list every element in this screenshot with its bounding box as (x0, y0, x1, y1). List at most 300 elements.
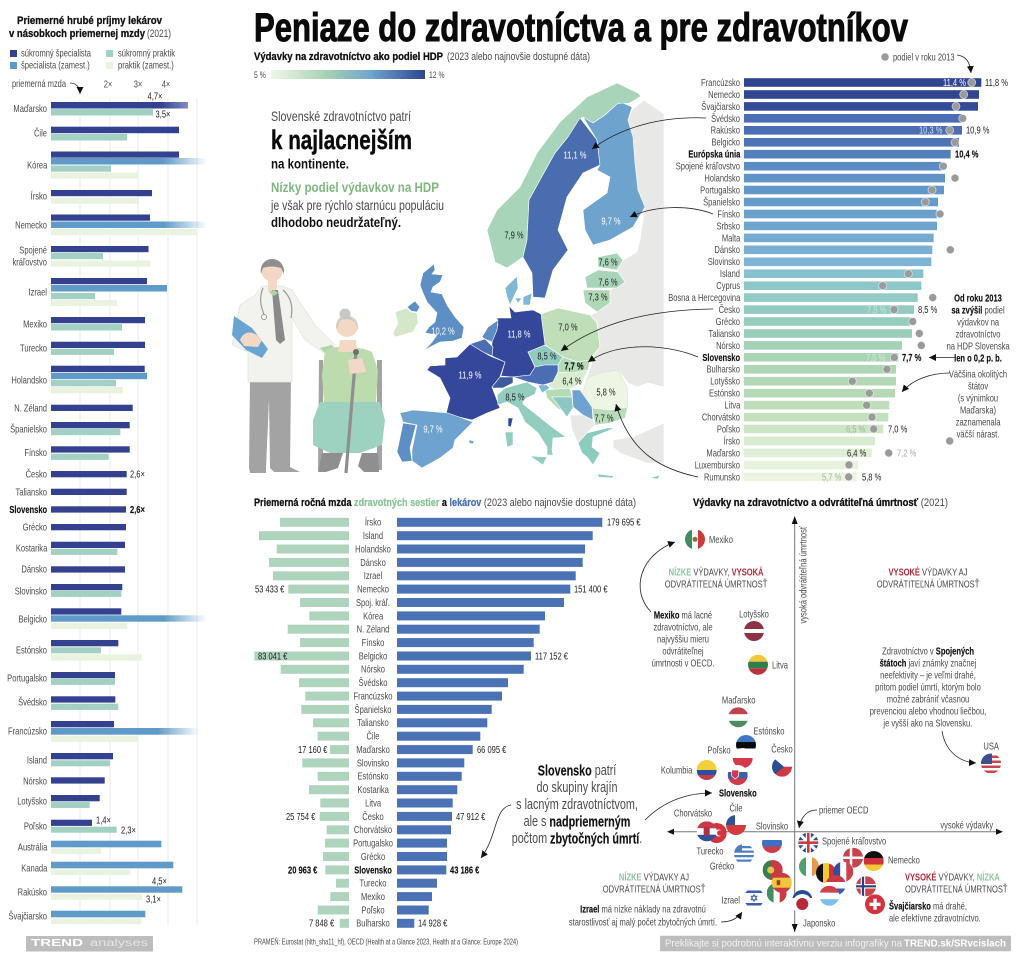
row: Česko: 47 912 € (456, 811, 485, 822)
map: Bulgaria (592, 407, 628, 425)
label: Kolumbia: Kolumbia (661, 764, 693, 776)
row: Island: Island (363, 530, 383, 541)
row: Turecko (20, 342, 145, 355)
row: Turecko: Turecko (360, 877, 386, 889)
legend: colour scale: 12 % (429, 70, 445, 80)
bar: Rumunsko: 5,7 % (822, 471, 841, 483)
bar: Maďarsko: 7,2 % (897, 447, 916, 459)
callout: neighbouring states: Väčšina okolitých (949, 368, 1007, 380)
label: Maďarsko: Maďarsko (722, 694, 755, 706)
bar: Francúzsko: 11,4 % (943, 77, 966, 88)
map: Benelux (470, 320, 498, 356)
bar: Cyprus: Cyprus (716, 280, 740, 291)
row: Švédsko: Švédsko (18, 696, 47, 708)
label: Japonsko: Japonsko (803, 917, 835, 929)
map: Finland (583, 103, 645, 245)
row: Island: Island (27, 754, 47, 766)
row: Španielsko (10, 422, 130, 435)
row: Turecko (336, 877, 437, 889)
quadrant label: low spending, high mortality: ODVRÁTITEĽNÁ ÚMRTNOSŤ (665, 578, 768, 590)
row: Mexiko: Mexiko (361, 891, 385, 902)
row: Spoj. kráľ.: Spoj. kráľ. (356, 597, 390, 608)
row: Kostarika (309, 784, 457, 795)
map: Slovakia (558, 357, 590, 373)
row: Turecko: Turecko (20, 342, 47, 354)
map: Austria (513, 365, 558, 385)
row: Česko (26, 468, 145, 480)
row: Holandsko: Holandsko (355, 543, 391, 555)
note: Mexiko: zdravotníctvo, ale (653, 621, 713, 633)
bar: Belgicko: Belgicko (711, 137, 740, 148)
row: Island (27, 753, 113, 766)
row: N. Zéland: N. Zéland (357, 623, 389, 635)
row: Poľsko (24, 814, 136, 836)
row: Slovensko: 2,6× (130, 504, 145, 515)
row: Slovensko: 20 963 € (288, 864, 317, 876)
label: Izrael: Izrael (722, 894, 740, 906)
bar: Belgicko (711, 137, 959, 148)
row: Portugalsko (325, 837, 447, 849)
row: Poľsko: 1,4× (96, 814, 111, 826)
bar: Estónsko: Estónsko (709, 387, 740, 399)
row: Belgicko (18, 608, 207, 629)
flag: Slovensko (728, 765, 748, 786)
patient in chair (313, 308, 385, 473)
row: Maďarsko: 17 160 € (298, 744, 327, 755)
flag: Turecko (710, 823, 727, 843)
row: Chorvátsko: Chorvátsko (354, 824, 392, 836)
label: Slovensko: Slovensko (719, 787, 757, 799)
row: Dánsko: Dánsko (360, 557, 386, 568)
map: Ireland (393, 308, 418, 337)
row: Česko: Česko (362, 811, 384, 822)
butterfly chart: salaries (254, 517, 641, 929)
map: Slovenia (538, 385, 550, 393)
label: priemer OECD (799, 804, 869, 828)
row: Grécko (23, 521, 126, 533)
bar: Slovensko (702, 352, 921, 363)
note: USA: štátoch javí známky značnej (880, 657, 976, 669)
note: Mexiko (640, 542, 714, 669)
map value labels: 7,3 % (588, 291, 608, 303)
label: Mexiko: Mexiko (709, 534, 733, 545)
bar: Dánsko (714, 244, 954, 256)
map: France (427, 344, 505, 420)
row: Bulharsko: 14 928 € (418, 918, 447, 929)
bar: Bosna a Hercegovina (668, 292, 937, 303)
row: Holandsko: Holandsko (11, 374, 47, 386)
row: Belgicko: 117 152 € (535, 650, 568, 662)
callout: Slovakia cheap healthcare: počtom zbytočných úmrtí. (512, 829, 642, 847)
bar: Česko (719, 304, 937, 315)
bar: Maďarsko (706, 447, 916, 459)
row: Francúzsko (305, 690, 502, 702)
row: Spojené kráľovstvo: Spojené (19, 244, 47, 256)
row: Francúzsko: Francúzsko (354, 690, 392, 702)
row: Kórea (309, 610, 545, 622)
scatter chart (569, 516, 1008, 932)
logo: TREND analyses: analyses (90, 938, 148, 949)
quadrant label: high spending, low mortality (905, 871, 1008, 895)
flag: Nemecko (864, 851, 884, 872)
bar: Poľsko: Poľsko (717, 423, 740, 435)
row: Izrael: Izrael (364, 570, 382, 582)
row: Česko: 2,6× (130, 468, 145, 480)
row: Fínsko: Fínsko (24, 447, 47, 458)
bar: Bosna a Hercegovina: Bosna a Hercegovina (668, 292, 741, 303)
bar: Cyprus (716, 280, 921, 291)
map value labels: 9,7 % (423, 423, 443, 435)
heading: doctors' income: Priemerné hrubé príjmy lekárov (17, 15, 163, 27)
heading: salaries: Priemerná ročná mzda zdravotných sestier a lekárov (2023 alebo najnovšie dostupné dáta) (254, 497, 636, 509)
row: Slovinsko: Slovinsko (15, 585, 47, 597)
banner: interactive version (660, 936, 1011, 951)
text block: intro: na kontinente. (271, 156, 349, 172)
quadrant label: low spending, low mortality: NÍZKE VÝDAVKY AJ (619, 871, 689, 883)
legend: doctor types: praktik (zamest.) (118, 59, 174, 71)
row: Belgicko: Belgicko (18, 613, 47, 625)
flag: Luxembursko (819, 886, 839, 906)
callout: Slovakia cheap healthcare: do skupiny krajín (537, 778, 617, 796)
bar: Francúzsko: Francúzsko (701, 77, 740, 88)
bar: Slovinsko: Slovinsko (708, 256, 740, 268)
row: Kanada (21, 862, 173, 875)
banner: interactive version: Preklikajte si podrobnú interaktívnu verziu infografiky na (665, 938, 902, 950)
bar: Litva (724, 399, 889, 411)
heading: doctors' income: v násobkoch priemernej mzdy (9, 28, 146, 40)
axes: vysoké výdavky (940, 819, 993, 831)
map: Germany (492, 306, 545, 377)
map value labels: 9,7 % (601, 215, 621, 227)
row: Litva (320, 797, 453, 809)
bar: Slovensko: Slovensko (702, 352, 740, 363)
row: N. Zéland (288, 623, 540, 635)
flag: Grécko (734, 844, 754, 864)
callout: Slovak increase: len o 0,2 p. b. (954, 352, 1002, 364)
map of Europe (393, 83, 664, 479)
quadrant label: high spending, low mortality: VYSOKÉ VÝDAVKY, NÍZKA (905, 871, 1000, 883)
flag: Česko (772, 757, 792, 777)
bar: Nemecko: Nemecko (708, 89, 740, 100)
label: Čile: Čile (729, 802, 743, 814)
map: United Kingdom (407, 264, 464, 352)
bar: Česko: Česko (719, 304, 740, 315)
row: Kostarika: Kostarika (16, 542, 48, 554)
callout: Slovak increase: sa zvýšil podiel (951, 304, 1005, 316)
bar: Dánsko: Dánsko (714, 244, 740, 256)
quadrant label: low spending, low mortality: ODVRÁTITEĽNÁ ÚMRTNOSŤ (603, 883, 706, 895)
row: Švédsko (299, 677, 508, 688)
row: Rakúsko: 4,5× (152, 875, 167, 887)
subtitle: share of GDP (254, 51, 590, 63)
legend: doctor types: súkromný praktik (118, 47, 175, 59)
row: Belgicko: 83 041 € (258, 650, 287, 662)
flag: Čile (726, 815, 746, 835)
bar: Česko: 7,5 % (867, 304, 886, 315)
map value labels: 8,5 % (505, 391, 525, 403)
subtitle: share of GDP: (2023 alebo najnovšie dostupné dáta) (447, 51, 590, 63)
bar: Luxembursko: Luxembursko (695, 459, 740, 471)
row: Kórea: Kórea (27, 159, 48, 171)
axes: vysoká odvrátiteľná úmrtnosť (797, 526, 809, 624)
row: Španielsko: Španielsko (10, 423, 47, 435)
flag: Kórea (792, 890, 812, 898)
row: N. Zéland (14, 402, 133, 414)
row: Kanada: Kanada (21, 862, 48, 874)
bar: Chorvátsko: Chorvátsko (702, 411, 740, 423)
map: Corsica (508, 418, 513, 427)
map: Spain (400, 410, 474, 468)
map value labels: 11,8 % (508, 328, 530, 340)
row: Grécko (323, 851, 447, 862)
legend: 2013 share (881, 51, 971, 73)
label: Česko: Česko (771, 743, 793, 755)
bar: Grécko (716, 316, 917, 327)
map: Italy (497, 382, 566, 465)
axis labels: 4× (162, 78, 170, 90)
row: Maďarsko: 3,5× (156, 108, 170, 120)
row: Nemecko: 151 400 € (574, 583, 608, 595)
row: Čile (34, 127, 179, 140)
bar: Malta (722, 232, 934, 244)
text block: intro: dlhodobo neudržateľný. (271, 214, 401, 230)
map value labels: 11,1 % (564, 149, 586, 161)
flag: Lotyšsko (744, 621, 764, 641)
callout: neighbouring states: Maďarska) (960, 404, 996, 416)
axis labels: 3× (134, 78, 142, 90)
bar: Luxembursko (695, 459, 858, 471)
callout: neighbouring states: (s výnimkou (958, 392, 998, 404)
map value labels: 10,2 % (431, 325, 455, 337)
bar: Rakúsko: Rakúsko (711, 125, 740, 136)
bar: Maďarsko: 6,4 % (847, 447, 866, 459)
row: Rakúsko (18, 875, 182, 905)
flag: Poľsko (733, 748, 753, 768)
row: Švajčiarsko: Švajčiarsko (8, 910, 47, 922)
axis labels: 2× (104, 78, 112, 90)
row: Francúzsko (8, 721, 199, 742)
heading: scatter: Výdavky na zdravotníctvo a odvrátiteľná úmrtnosť (2021) (693, 497, 948, 509)
axis labels (12, 78, 197, 925)
callout: neighbouring states (902, 368, 1007, 440)
map value labels: 7,6 % (598, 276, 618, 288)
row: Slovensko: 43 186 € (450, 864, 479, 876)
map: Sweden (523, 118, 600, 298)
row: Španielsko: Španielsko (355, 704, 391, 715)
row: Nemecko: 53 433 € (255, 583, 284, 595)
note: Mexiko: odvrátiteľnej (662, 645, 704, 657)
row: Maďarsko: Maďarsko (13, 103, 47, 114)
row: Švajčiarsko (8, 910, 145, 924)
bar: Slovensko: 7,7 % (902, 352, 921, 363)
row: Slovensko (9, 504, 145, 515)
map: Norway (487, 83, 641, 268)
flag: Portugalsko (763, 860, 783, 880)
bar: Portugalsko (700, 184, 944, 196)
legend: colour scale: 5 % (254, 70, 266, 80)
row: Bulharsko: 7 848 € (309, 918, 334, 929)
row: Fínsko: Fínsko (362, 637, 384, 648)
flag: Maďarsko (728, 707, 748, 728)
row: Španielsko (301, 704, 492, 715)
row: Írsko: 179 695 € (607, 517, 641, 528)
note: USA (870, 645, 986, 763)
row: Holandsko (277, 543, 585, 555)
row: Slovensko (288, 864, 479, 876)
label: Chorvátsko: Chorvátsko (674, 807, 712, 819)
row: Nórsko: Nórsko (361, 664, 385, 675)
row: Švédsko: Švédsko (359, 677, 387, 688)
text block: intro: Nízky podiel výdavkov na HDP (271, 179, 439, 195)
bar: Švajčiarsko: Švajčiarsko (701, 101, 740, 112)
note: Švajčiarsko: ale efektívne zdravotníctvo. (889, 912, 981, 924)
row: Lotyšsko (17, 795, 100, 808)
row: Poľsko: Poľsko (24, 820, 47, 832)
bar: Česko: 8,5 % (918, 304, 937, 315)
row: Poľsko (318, 904, 429, 916)
bar: Island: Island (720, 268, 740, 279)
bar: Švajčiarsko (701, 101, 978, 112)
bar: Fínsko (717, 208, 944, 220)
row: Mexiko: Mexiko (23, 318, 47, 330)
map: Serbia (572, 390, 593, 420)
doctor (232, 259, 336, 473)
source: PRAMEŇ: Eurostat (hlth_sha11_hf), OECD (Health at a Glance 2023, Health at a Glance: Europe 2024) (254, 937, 518, 947)
bar: Bulharsko: Bulharsko (706, 364, 740, 375)
bar: Estónsko (709, 387, 895, 399)
map value labels: 8,5 % (537, 350, 557, 362)
label: Turecko: Turecko (697, 845, 723, 857)
row: Portugalsko: Portugalsko (7, 672, 47, 684)
bar: Slovinsko (708, 256, 931, 268)
row: Taliansko (16, 486, 127, 498)
note: Švajčiarsko: Švajčiarsko má drahé, (889, 899, 967, 912)
note: Mexiko: najvyššiu mieru (657, 633, 709, 645)
heading: doctors' income: (2021) (147, 28, 171, 40)
row: Belgicko (254, 650, 568, 662)
map value labels: 11,9 % (459, 369, 481, 381)
row: Rakúsko: Rakúsko (18, 886, 47, 898)
map value labels: 7,6 % (598, 256, 618, 268)
row: Fínsko (300, 637, 534, 648)
row: Estónsko: Estónsko (16, 644, 47, 656)
row: Grécko: Grécko (23, 521, 47, 533)
row: Slovinsko (302, 757, 464, 769)
note: USA: neefektivity – je veľmi drahé, (880, 669, 976, 681)
row: Maďarsko (298, 744, 506, 755)
row: Čile: Čile (366, 730, 380, 742)
row: Grécko: Grécko (361, 851, 385, 862)
row: Slovinsko (15, 584, 122, 597)
callout: Slovak increase: zdravotníctvo (956, 328, 1000, 340)
row: Izrael (273, 570, 576, 582)
flag: Estónsko (736, 735, 756, 748)
flag: USA (981, 754, 1001, 774)
text block: intro: k najlacnejším (271, 125, 412, 155)
legend: doctor types: súkromný špecialista (21, 47, 92, 59)
map value labels: 7,0 % (558, 321, 578, 333)
row: Fínsko (24, 446, 130, 460)
quadrant label: high spending, high mortality: ODVRÁTITEĽNÁ ÚMRTNOSŤ (877, 578, 980, 590)
bar: Nemecko (708, 89, 979, 100)
row: Mexiko (23, 317, 145, 330)
note: Švajčiarsko (889, 899, 981, 924)
flag: Chorvátsko (697, 821, 717, 842)
row: Estónsko (318, 771, 462, 782)
note: USA: prevenciou alebo vhodnou liečbou, (870, 705, 986, 717)
flag: Írsko (799, 857, 819, 877)
bar: Bulharsko (706, 364, 896, 375)
map: Romania (583, 370, 628, 410)
bar: Poľsko: 7,0 % (888, 423, 907, 435)
callout: neighbouring states: väčší nárast. (957, 428, 999, 440)
axis labels: priemerná mzda (12, 78, 66, 90)
flag: Švajčiarsko (865, 894, 885, 914)
row: Bulharsko (309, 918, 447, 929)
row: Slovinsko: Slovinsko (357, 757, 389, 769)
row: Bulharsko: Bulharsko (356, 918, 390, 929)
legend: colour scale (254, 70, 445, 80)
bar: Srbsko: Srbsko (717, 220, 740, 232)
map: non-included countries (570, 100, 664, 463)
row: Izrael: Izrael (29, 286, 47, 298)
bar: Rakúsko: 10,9 % (966, 125, 989, 136)
quadrant label: low spending, high mortality: NÍZKE VÝDAVKY, VYSOKÁ (669, 566, 764, 578)
row: Francúzsko: Francúzsko (8, 725, 47, 737)
label: priemer OECD: priemer OECD (819, 804, 869, 816)
map: Poland (541, 308, 600, 362)
note: Izrael: Izrael má nízke náklady na zdravotnú (580, 903, 706, 915)
flag: Slovinsko (762, 840, 782, 853)
map: Baltics (583, 253, 625, 312)
quadrant label: high spending, low mortality: ODVRÁTITEĽNÁ ÚMRTNOSŤ (905, 883, 1008, 895)
row: Dánsko: Dánsko (21, 563, 47, 575)
flag: Litva (748, 655, 768, 675)
bar: Malta: Malta (722, 232, 741, 244)
text block: intro: je však pre rýchlo starnúcu populáciu (270, 197, 444, 213)
label: Poľsko: Poľsko (707, 744, 731, 756)
map: Hungary (547, 370, 588, 390)
row: Nórsko (281, 664, 524, 675)
quadrant label: low spending, low mortality (603, 871, 706, 895)
bar: Rakúsko (711, 125, 989, 136)
callout: neighbouring states: zaznamenala (956, 416, 1001, 428)
row: Írsko (31, 190, 152, 204)
bar: Spojené kráľovstvo (676, 160, 947, 172)
row: Čile: Čile (34, 127, 47, 139)
map value labels: 6,4 % (562, 375, 582, 387)
bar: Francúzsko: 11,8 % (985, 77, 1008, 88)
bar: Švédsko: Švédsko (711, 113, 740, 124)
bar: Európska únia: 10,4 % (955, 148, 978, 160)
map: Bosnia (552, 397, 573, 417)
note: USA: je vyšší ako na Slovensku. (883, 717, 972, 729)
row: Estónsko: Estónsko (357, 771, 389, 782)
row: Nemecko: Nemecko (357, 583, 389, 595)
bar: Rumunsko: Rumunsko (704, 471, 740, 483)
callout: Slovakia cheap healthcare: Slovensko patrí (538, 761, 617, 779)
bar: Rumunsko: 5,8 % (862, 471, 881, 483)
row: Švédsko (18, 696, 118, 710)
note: Izrael: starostlivosť aj malý počet zbytočných úmrtí. (569, 916, 717, 928)
flag: Dánsko (843, 848, 863, 868)
heading: doctors' income (9, 15, 171, 40)
bar: Holandsko (704, 172, 959, 184)
note: USA: možné zabrániť včasnou (887, 693, 969, 705)
row: Rakúsko: 3,1× (146, 893, 161, 905)
row: Maďarsko: 4,7× (148, 90, 162, 102)
flag: Japonsko (794, 894, 810, 912)
